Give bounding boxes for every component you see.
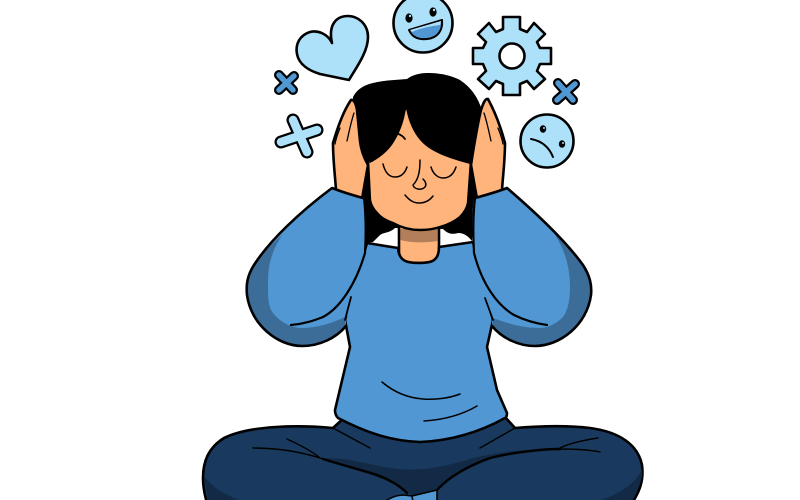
smile	[405, 195, 433, 203]
figure: sweater body	[335, 242, 507, 442]
figure: right hand	[471, 99, 505, 199]
icon: small cross right	[557, 83, 575, 100]
icon: small cross left	[279, 75, 294, 90]
right leg outline	[438, 449, 560, 489]
icon: heart	[297, 16, 368, 80]
hair fringe	[356, 82, 482, 164]
foot	[387, 490, 437, 500]
figure: face	[356, 82, 482, 230]
eyes	[383, 164, 456, 178]
icon: large cross left	[281, 120, 317, 152]
figure: hair back	[353, 73, 482, 243]
figure: left sleeve	[247, 188, 367, 346]
pants shadow between legs	[322, 450, 525, 496]
icon: sad face	[520, 114, 574, 168]
eyebrow	[396, 133, 405, 139]
icon: smiling face	[394, 0, 452, 52]
icon: gear	[473, 17, 551, 95]
left leg outline	[323, 459, 407, 493]
knee shadows	[204, 468, 642, 500]
nose	[413, 160, 426, 189]
figure: neck	[399, 220, 439, 263]
figure: left hand	[333, 100, 368, 199]
figure: right sleeve	[472, 188, 591, 346]
figure: pants	[203, 417, 642, 500]
